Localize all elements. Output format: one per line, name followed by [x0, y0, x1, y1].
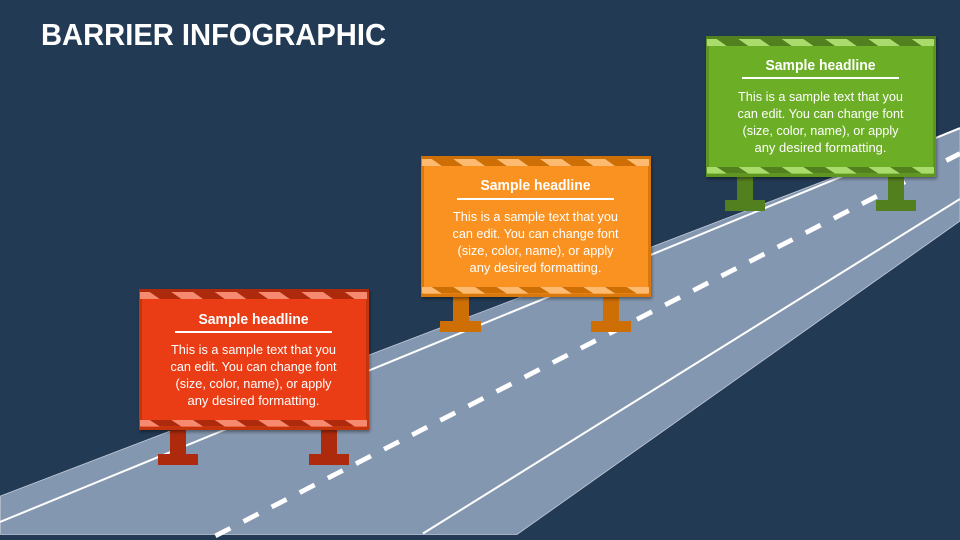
green barrier board [708, 38, 934, 176]
orange barrier body text: any desired formatting. [470, 260, 602, 275]
green barrier body text [738, 89, 904, 155]
orange barrier body text: (size, color, name), or apply [458, 243, 614, 258]
red barrier board [140, 290, 368, 428]
orange barrier headline: Sample headline [480, 178, 590, 194]
road edge line: lower [423, 199, 960, 534]
orange barrier top stripes [410, 159, 658, 166]
panel: red barrier [128, 289, 376, 465]
road edge line: upper [0, 128, 960, 522]
red barrier legs [158, 430, 349, 465]
green barrier body text: This is a sample text that you [738, 89, 903, 104]
green barrier legs [725, 177, 916, 211]
green barrier bottom stripes [695, 167, 943, 174]
green barrier top stripes [695, 39, 943, 46]
red barrier headline rule [175, 331, 332, 333]
green barrier headline rule [742, 77, 899, 79]
red barrier body text [170, 342, 337, 408]
green barrier headline: Sample headline [766, 58, 876, 74]
orange barrier headline rule [457, 198, 614, 200]
road surface [0, 129, 960, 534]
red barrier headline: Sample headline [198, 312, 308, 328]
road centre dashed line [215, 154, 960, 536]
title: BARRIER INFOGRAPHIC [41, 18, 386, 52]
orange barrier board [422, 158, 650, 296]
red barrier body text: This is a sample text that you [171, 342, 336, 357]
orange barrier legs [440, 297, 631, 332]
red barrier body text: any desired formatting. [188, 393, 320, 408]
orange barrier body text: This is a sample text that you [453, 209, 618, 224]
red barrier bottom stripes [128, 420, 376, 426]
orange barrier body text [452, 209, 619, 275]
orange barrier body text: can edit. You can change font [452, 226, 619, 241]
red barrier body text: can edit. You can change font [170, 359, 337, 374]
orange barrier bottom stripes [410, 287, 658, 294]
panel: orange barrier [410, 156, 658, 332]
red barrier top edge [139, 289, 369, 292]
red barrier body text: (size, color, name), or apply [176, 376, 332, 391]
orange barrier top edge [421, 156, 651, 159]
green barrier top edge [706, 36, 936, 39]
green barrier body text: can edit. You can change font [738, 106, 904, 121]
panel: green barrier [695, 36, 943, 211]
green barrier body text: (size, color, name), or apply [742, 123, 899, 138]
green barrier body text: any desired formatting. [754, 140, 886, 155]
road [0, 128, 960, 536]
red barrier top stripes [128, 292, 376, 299]
